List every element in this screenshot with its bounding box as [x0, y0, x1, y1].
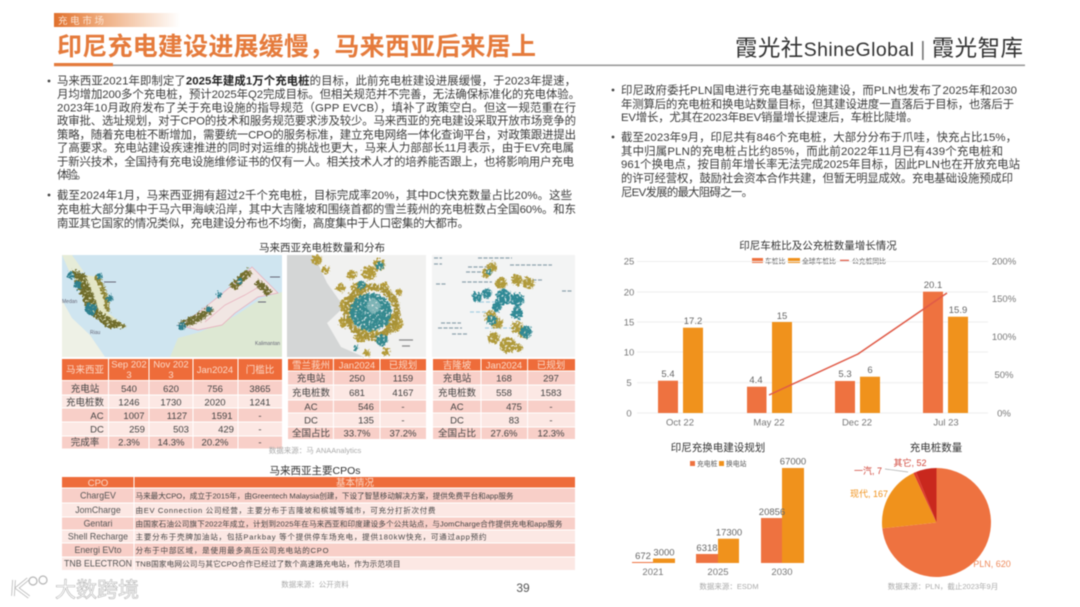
table: Kuala Lumpur: 27.6% — [491, 428, 518, 440]
watermark — [13, 576, 139, 602]
chart: vehicle-to-charger growth: 15 — [777, 311, 787, 322]
chart: Indonesia charging plan: 67000 — [780, 456, 806, 468]
table: Kuala Lumpur: 已规划 — [537, 360, 565, 372]
text block: Malaysia: 月均增加200多个充电桩，预计2025年Q2完成目标。但相关规范并不完善，无法确保标准化的充电体验。 — [57, 87, 580, 101]
table: main CPOs: CPO — [88, 478, 108, 489]
chart: vehicle-to-charger growth: 4.4 — [749, 375, 763, 386]
table: Malaysia national: 259 — [129, 424, 145, 436]
table: main CPOs: ChargEV — [80, 490, 116, 500]
table: Kuala Lumpur: 吉隆坡 — [443, 360, 472, 372]
table: Selangor: 37.2% — [390, 428, 417, 440]
map: Malaysia national — [62, 255, 282, 357]
table: Malaysia national: 马来西亚 — [66, 365, 104, 376]
chart: vehicle-to-charger growth: Oct 22 — [666, 418, 694, 428]
table: Malaysia national: Nov 202 — [153, 360, 189, 370]
table: Kuala Lumpur: 1583 — [540, 388, 562, 399]
table: Kuala Lumpur: - — [549, 416, 553, 426]
table: main CPOs: TNB ELECTRON — [64, 558, 132, 568]
table: main CPOs — [62, 477, 575, 570]
table: Selangor: 1159 — [393, 374, 413, 384]
chart: vehicle-to-charger growth: 17.2 — [684, 316, 702, 327]
table: Selangor: - — [401, 416, 405, 426]
text block: Indonesia: 印尼政府委托PLN国电进行充电基础设施建设，而PLN也发布了2025年和2030 — [621, 83, 1017, 97]
heading: Malaysia charger map: 马来西亚充电桩数量和分布 — [259, 241, 385, 254]
table: Selangor — [288, 359, 426, 440]
table: Malaysia national: Sep 202 — [111, 360, 147, 370]
chart: charger count pie: PLN, 620 — [973, 559, 1011, 569]
table: main CPOs: 由国家石油公司旗下2022年成立，计划到2025年在马来西亚和印度建设多个公共站点，与JomCharge合作提供充电和app服务 — [136, 518, 563, 528]
chart: Indonesia charging plan — [632, 441, 806, 591]
text block: Malaysia: 政审批、选址规划，对于CPO的技术和服务规范要求涉及较少。马来西亚的充电建设采取开放市场竞争的 — [57, 114, 576, 128]
table: Selangor: 33.7% — [344, 428, 371, 440]
text block: Malaysia: 2023年10月政府发布了关于充电设施的指导规范（GPP EVCB），填补了政策空白。但这一规范重在行 — [57, 100, 576, 114]
table: Malaysia national: 540 — [121, 384, 137, 395]
table: Kuala Lumpur: 83 — [509, 416, 519, 426]
table: Kuala Lumpur: Jan2024 — [486, 360, 522, 372]
chart: vehicle-to-charger growth: 20.1 — [924, 280, 942, 291]
heading: CPO table: 马来西亚主要CPOs — [269, 465, 361, 477]
chart: Indonesia charging plan: 6318 — [696, 543, 718, 554]
text block: Indonesia: 截至2023年9月，印尼共有846个充电桩，大部分分布于爪哇，快充占比15%， — [621, 130, 1017, 144]
chart: vehicle-to-charger growth: Jul 23 — [933, 418, 959, 428]
watermark: 大数跨境 — [55, 579, 139, 602]
table: Malaysia national: 充电站 — [71, 383, 100, 395]
table: Malaysia national: AC — [90, 411, 104, 422]
logo: ShineGlobal: 霞光社ShineGlobal | 霞光智库 — [735, 36, 1023, 61]
chart: vehicle-to-charger growth: 150% — [992, 294, 1017, 305]
chart: vehicle-to-charger growth: 20 — [624, 288, 634, 298]
section tag: 充电市场 — [58, 15, 104, 27]
chart: Indonesia charging plan: 672 — [635, 551, 651, 562]
chart: vehicle-to-charger growth: 5.3 — [838, 369, 852, 380]
table: Selangor: 充电桩数 — [292, 387, 330, 399]
text block: Malaysia: 南亚其它国家的情况类似，充电建设分布也不均衡，高度集中于人口密集的大都市。 — [57, 216, 469, 230]
table: Selangor: AC — [304, 402, 318, 413]
table: Malaysia national: 429 — [218, 424, 234, 436]
chart legend: 车桩比 — [765, 256, 786, 266]
table: main CPOs: JomCharge — [75, 505, 121, 515]
table: Malaysia national: 2020 — [204, 398, 226, 408]
chart: charger count pie: 现代, 167 — [850, 489, 888, 499]
chart legend: 换电站 — [726, 459, 747, 468]
table: Malaysia national: 503 — [173, 424, 189, 436]
chart: vehicle-to-charger growth: 5 — [626, 378, 632, 389]
chart: vehicle-to-charger growth: May 22 — [753, 418, 785, 428]
table: Selangor: 681 — [349, 388, 365, 399]
chart: Indonesia charging plan: 数据来源：ESDM — [699, 581, 759, 591]
table: Malaysia national: - — [258, 438, 262, 448]
table: Malaysia national: 完成率 — [71, 436, 100, 448]
text block: Malaysia: 策略，随着充电桩不断增加，需要统一CPO的服务标准，建立充电网络一体化查询平台，对政策跟进提出 — [57, 128, 576, 142]
table: Selangor: DC — [304, 416, 318, 426]
chart: Indonesia charging plan: 20856 — [759, 507, 785, 518]
table: Malaysia national: 3865 — [249, 384, 271, 395]
text block: Indonesia: 其中归属PLN的充电桩占比约85%，而此前2022年11月已有439个充电桩和 — [621, 144, 1003, 158]
text block: Malaysia: 马来西亚2021年即制定了2025年建成1万个充电桩的目标，此前充电桩建设进展缓慢，于2023年提速， — [57, 74, 576, 88]
text block: Indonesia: 的许可经营权，鼓励社会资本合作共建，但暂无明显成效。充电基础设施预成印 — [621, 171, 1013, 185]
text block: Indonesia: 961个换电点，按目前年增长率无法完成2025年目标，因此PLN也在开放充电站 — [621, 157, 1020, 171]
table: Malaysia national: 1007 — [123, 411, 145, 422]
table: Kuala Lumpur: 12.3% — [538, 428, 565, 440]
title: 印尼充电建设进展缓慢，马来西亚后来居上 — [57, 33, 536, 61]
table: Malaysia national: 620 — [163, 384, 179, 395]
source: CPO table: 数据来源：公开资料 — [281, 579, 349, 589]
table: main CPOs: 由EV Connection 公司经营，主要分布于吉隆坡和槟城等城市，可充分打折次付费 — [136, 505, 436, 515]
text block: Malaysia: 截至2024年1月，马来西亚拥有超过2千个充电桩，目标完成率20%，其中DC快充数量占比20%。这些 — [57, 188, 572, 202]
chart: vehicle-to-charger growth: 50% — [994, 370, 1014, 381]
page number: 39 — [516, 581, 530, 595]
text block: Malaysia: 了高要求。充电站建设疾速推进的同时对运维的挑战也更大，马来人力部部长11月表示，由于EV充电属 — [57, 140, 574, 154]
table: Malaysia national: 14.3% — [158, 438, 185, 448]
table: main CPOs: Shell Recharge — [68, 532, 128, 542]
table: Kuala Lumpur: 558 — [496, 388, 512, 399]
chart: vehicle-to-charger growth: 15 — [624, 318, 634, 328]
table: Malaysia national: 756 — [207, 384, 223, 395]
section tag — [54, 13, 180, 27]
text block: Malaysia: 于新兴技术，全国持有充电设施维修证书的仅有一人。相关技术人才的培养能否跟上，也将影响用户充电 — [57, 154, 574, 168]
chart: vehicle-to-charger growth — [624, 239, 1017, 428]
table: Selangor: Jan2024 — [339, 360, 375, 372]
text block: Malaysia: 体验。 — [57, 168, 87, 182]
table: Malaysia national: DC — [90, 424, 104, 436]
table: main CPOs: 分布于中部区域，是使用最多高压公司充电站的CPO — [136, 545, 329, 555]
chart legend — [690, 459, 747, 468]
map: Selangor — [287, 255, 426, 357]
table: Kuala Lumpur: 297 — [543, 374, 559, 384]
table: Selangor: 充电站 — [297, 372, 326, 384]
chart: charger count pie: 数据来源：PLN，截止2023年9月 — [888, 581, 998, 591]
chart: vehicle-to-charger growth: 100% — [992, 332, 1017, 343]
table: main CPOs: 马来最大CPO，成立于2015年，由Greentech Malaysia创建，下设了智慧移动解决方案，提供免费平台和app服务 — [136, 490, 514, 500]
text block: Indonesia: 尼EV发展的最大阻碍之一。 — [621, 185, 753, 199]
chart legend — [752, 256, 886, 266]
chart: vehicle-to-charger growth: 5.4 — [661, 369, 675, 380]
chart: charger count pie: 充电桩数量 — [910, 441, 963, 454]
table: Kuala Lumpur: 充电桩数 — [438, 387, 476, 399]
chart: vehicle-to-charger growth: 15.9 — [949, 305, 967, 316]
table: Selangor: 已规划 — [389, 360, 417, 372]
chart: charger count pie — [850, 441, 1011, 591]
chart legend: 全球车桩比 — [802, 256, 836, 266]
table: Malaysia national: 1730 — [160, 398, 182, 408]
source: maps: 数据来源：马 ANAAnalytics — [269, 445, 362, 455]
table: Selangor: 546 — [358, 402, 374, 413]
text block: Malaysia — [48, 74, 580, 230]
chart legend: 充电桩 — [697, 459, 718, 468]
chart: vehicle-to-charger growth: 10 — [624, 348, 634, 358]
table: Malaysia national: 1591 — [211, 411, 233, 422]
chart: vehicle-to-charger growth: 25 — [624, 256, 634, 268]
table: Kuala Lumpur: AC — [450, 402, 464, 413]
table: Malaysia national: 3 — [168, 370, 174, 381]
text block: Malaysia: 充电桩大部分集中于马六甲海峡沿岸，其中大吉隆坡和围绕首都的雪兰莪州的充电桩数占全国60%。和东 — [57, 202, 576, 216]
chart: Indonesia charging plan: 17300 — [716, 528, 742, 538]
table: Kuala Lumpur: 475 — [506, 402, 522, 413]
chart: vehicle-to-charger growth: 印尼车桩比及公充桩数量增长情况 — [739, 239, 897, 252]
table: Kuala Lumpur: DC — [450, 416, 464, 426]
table: main CPOs: Energi EVto — [75, 545, 122, 555]
chart: Indonesia charging plan: 2030 — [771, 567, 793, 578]
chart: Indonesia charging plan: 印尼充换电建设规划 — [671, 441, 765, 454]
map: Malaysia national: Kalimantan — [255, 341, 280, 347]
table: Selangor: 全国占比 — [292, 428, 330, 440]
table: Malaysia national: 1246 — [118, 398, 140, 408]
table: Selangor: 135 — [358, 416, 374, 426]
table: Selangor: 雪兰莪州 — [292, 360, 330, 372]
table: Kuala Lumpur: 168 — [496, 374, 512, 384]
table: Malaysia national: 门槛比 — [246, 364, 274, 376]
text block: Indonesia: EV增长，尤其在2023年BEV销量增长提速后，车桩比陡增。 — [621, 110, 918, 124]
chart legend: 公充桩同比 — [852, 256, 886, 266]
text block: Indonesia — [612, 83, 1020, 199]
table: Kuala Lumpur: 充电站 — [443, 372, 472, 384]
map: Kuala Lumpur — [432, 255, 575, 357]
table: main CPOs: 基本情况 — [336, 477, 374, 489]
table: Malaysia national: - — [258, 411, 262, 422]
table: main CPOs: TNB国家电网公司与其它CPO合作已经过了数个高速路充电站，作为示范项目 — [136, 558, 400, 568]
text block: Indonesia: 年测算后的充电桩和换电站数量目标，但其建设进度一直落后于目标，也落后于 — [621, 97, 1014, 111]
table: Kuala Lumpur: 全国占比 — [438, 428, 476, 440]
table: Malaysia national: 1127 — [167, 411, 187, 422]
chart: vehicle-to-charger growth: 0 — [626, 408, 632, 420]
chart: charger count pie: 一汽, 7 — [854, 465, 882, 476]
table: Malaysia national: 1241 — [249, 398, 271, 408]
chart: charger count pie: 其它, 52 — [893, 457, 927, 468]
table: Selangor: 4167 — [392, 388, 414, 399]
table: Kuala Lumpur: - — [549, 402, 553, 413]
chart: vehicle-to-charger growth: 6 — [867, 365, 873, 376]
table: Malaysia national: 充电桩数 — [66, 396, 104, 408]
table: Kuala Lumpur — [433, 359, 575, 440]
table: Malaysia national: 20.2% — [202, 438, 229, 448]
table: Malaysia national: 3 — [126, 370, 132, 381]
chart: vehicle-to-charger growth: Dec 22 — [842, 418, 872, 428]
chart: Indonesia charging plan: 2025 — [707, 567, 729, 578]
chart: Indonesia charging plan: 3000 — [653, 548, 675, 558]
table: Malaysia national: Jan2024 — [197, 365, 233, 376]
table: main CPOs: Gentari — [84, 518, 112, 528]
table: Malaysia national: - — [258, 424, 262, 436]
map: Malaysia national: Riau — [90, 330, 101, 336]
table: Selangor: - — [401, 402, 405, 413]
chart: Indonesia charging plan: 2021 — [642, 567, 664, 578]
table: main CPOs: 主要分布于壳牌加油站，包括Parkbay 等个提供停车场充电，提供180kW快充，可通过app预约 — [136, 532, 486, 542]
table: Malaysia national: 2.3% — [118, 438, 140, 448]
chart: vehicle-to-charger growth: 200% — [992, 256, 1017, 268]
chart: vehicle-to-charger growth: 0% — [997, 408, 1011, 420]
table: Malaysia national — [62, 359, 282, 448]
table: Selangor: 250 — [349, 374, 365, 384]
title rule — [54, 63, 1025, 66]
map: Malaysia national: Medan — [62, 299, 78, 305]
